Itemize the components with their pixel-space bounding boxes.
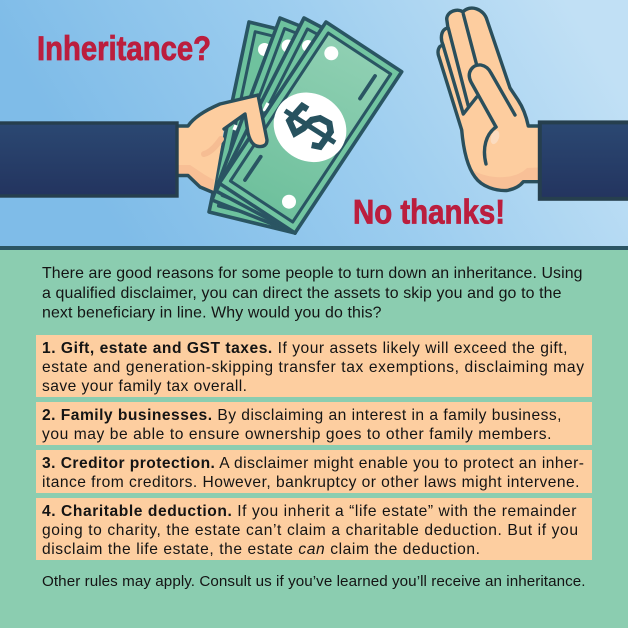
callout 3: creditor protection: itance from creditors. However, bankruptcy or other laws might intervene. xyxy=(42,474,580,491)
callout 1: gift, estate and GST taxes: 1. Gift, estate and GST taxes. If your assets likely will exceed the gift, xyxy=(42,340,568,357)
callout 3: creditor protection: 3. Creditor protection. A disclaimer might enable you to protect an inher- xyxy=(42,455,584,472)
intro paragraph: There are good reasons for some people to turn down an inheritance. Using xyxy=(42,265,582,282)
icon: stack of banknotes xyxy=(209,18,402,233)
icon: left hand holding the money xyxy=(178,95,267,193)
thumb highlight xyxy=(489,129,501,145)
callout 2: family businesses: 2. Family businesses. By disclaiming an interest in a family business, xyxy=(42,407,562,424)
callout 1: gift, estate and GST taxes xyxy=(36,335,592,397)
banknote corner dots xyxy=(282,46,338,209)
intro paragraph: next beneficiary in line. Why would you do this? xyxy=(42,304,382,322)
banknote side marks xyxy=(245,76,375,180)
callout 4: charitable deduction: going to charity, the estate can’t claim a charitable deduction. But if you xyxy=(42,522,578,539)
divider bar xyxy=(0,246,628,250)
callout 3: creditor protection xyxy=(36,450,592,493)
callout 4: charitable deduction xyxy=(36,498,592,560)
intro paragraph: a qualified disclaimer, you can direct the assets to skip you and go to the xyxy=(42,285,562,302)
icon: right hand raised in refusal xyxy=(438,8,538,191)
left sleeve xyxy=(0,123,177,196)
hand outline and fingers xyxy=(438,8,538,191)
title: No thanks!: No thanks! xyxy=(353,194,505,232)
header background xyxy=(0,0,628,247)
closing note: Other rules may apply. Consult us if you’ve learned you’ll receive an inheritance. xyxy=(42,573,586,590)
callout 4: charitable deduction: 4. Charitable deduction. If you inherit a “life estate” with the remainder xyxy=(42,503,576,520)
callout 2: family businesses xyxy=(36,402,592,445)
callout 1: gift, estate and GST taxes: estate and generation-skipping transfer tax exemptions, disclaiming may xyxy=(42,359,584,376)
lower green panel xyxy=(0,249,628,628)
callout 4: charitable deduction: disclaim the life estate, the estate can claim the deduction. xyxy=(42,541,480,558)
callout 2: family businesses: you may be able to ensure ownership goes to other family members. xyxy=(42,426,552,443)
callout 1: gift, estate and GST taxes: save your family tax overall. xyxy=(42,378,247,395)
right sleeve xyxy=(540,122,628,199)
icon: dollar sign xyxy=(285,106,335,147)
intro paragraph xyxy=(42,265,582,322)
banknote medallion xyxy=(260,79,360,176)
title: Inheritance?: Inheritance? xyxy=(37,30,211,68)
